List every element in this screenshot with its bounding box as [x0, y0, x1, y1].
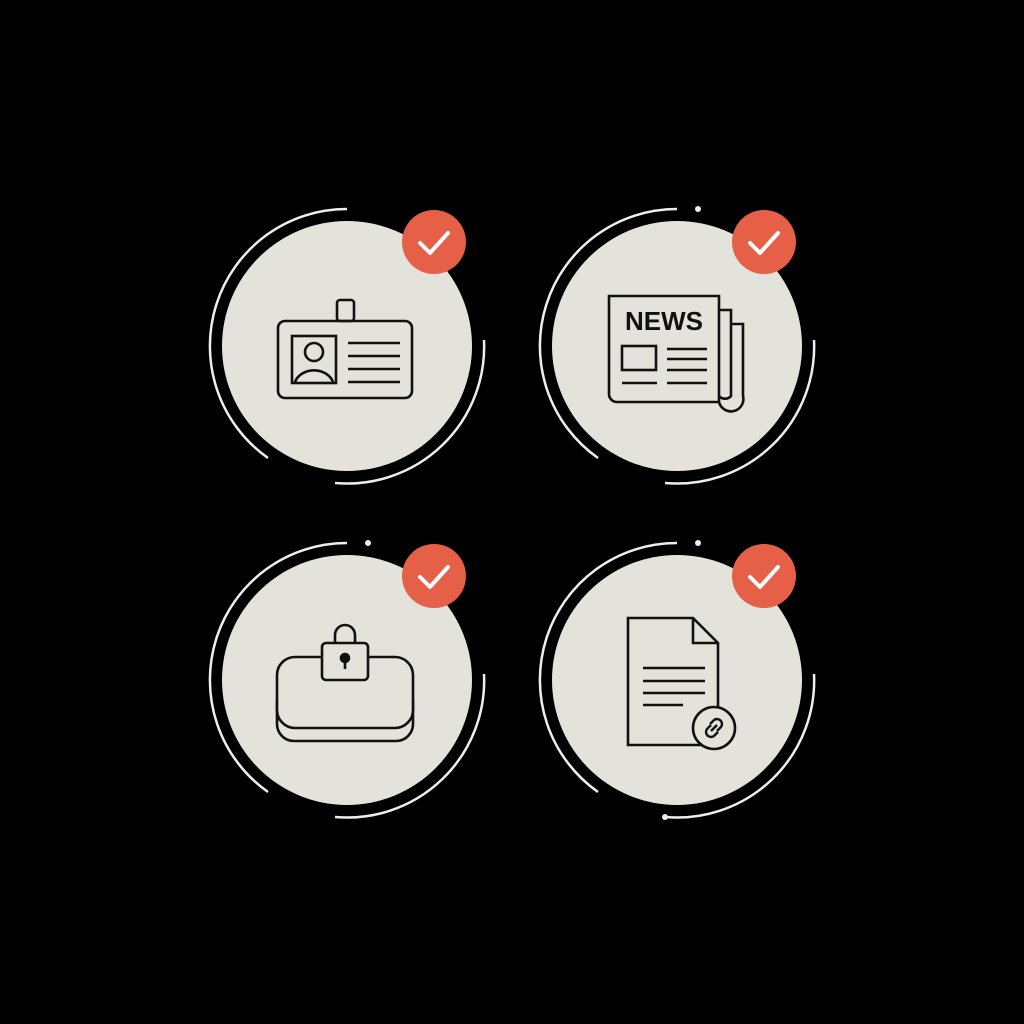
icon: document with link — [628, 618, 735, 749]
panel: linked document — [540, 540, 814, 820]
icon: locked wallet — [277, 625, 413, 741]
badge: check — [732, 210, 796, 274]
icon: newspaper — [609, 296, 743, 411]
panel: news — [540, 206, 814, 484]
badge: check — [732, 544, 796, 608]
icon: ID badge — [278, 300, 412, 398]
panel: news: NEWS — [625, 306, 703, 336]
badge: check — [402, 210, 466, 274]
badge: check — [402, 544, 466, 608]
panel: locked storage — [210, 540, 484, 818]
panel: ID card — [210, 209, 484, 484]
